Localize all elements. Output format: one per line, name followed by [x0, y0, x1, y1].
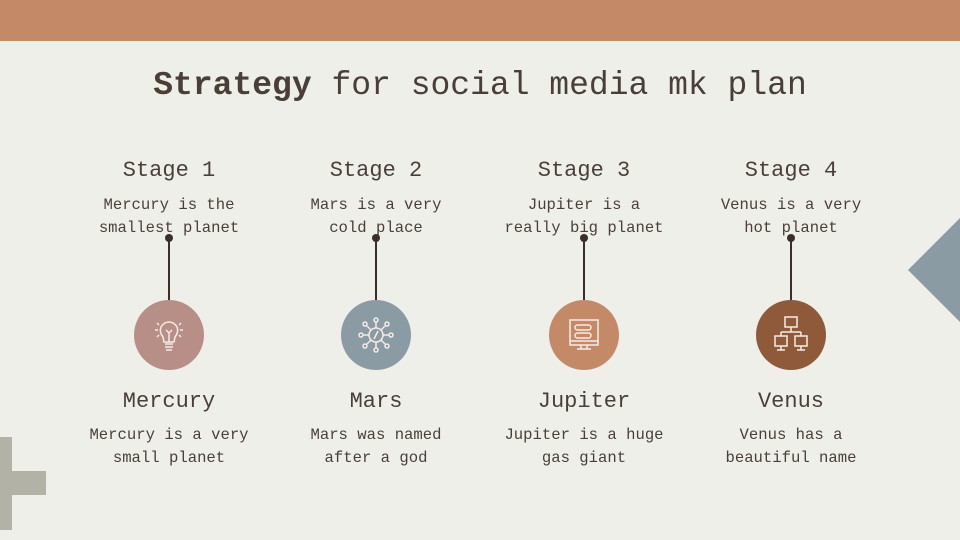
icon: lightbulb [134, 300, 204, 370]
stage 4 heading: Stage 4 [745, 158, 837, 183]
stage 3 text: really big planet [504, 219, 664, 237]
stage 1 heading: Stage 1 [123, 158, 215, 183]
icon: computer network [756, 300, 826, 370]
description: small planet [113, 449, 225, 467]
column: stage 3 [504, 158, 664, 467]
name: Mars [350, 389, 402, 414]
connector [168, 238, 170, 300]
description [504, 426, 664, 467]
icon: monitor [549, 300, 619, 370]
stage 1 text: smallest planet [99, 219, 239, 237]
stage 2 text: cold place [329, 219, 423, 237]
column: stage 4 [721, 158, 861, 467]
description: Mercury is a very [89, 426, 249, 444]
stage 1 text [99, 196, 239, 237]
column: stage 2 [310, 158, 442, 467]
stage 4 text [721, 196, 861, 237]
stage 3 heading: Stage 3 [538, 158, 630, 183]
description [725, 426, 856, 467]
decoration: cross [0, 437, 46, 530]
connector [583, 238, 585, 300]
stage 2 heading: Stage 2 [330, 158, 422, 183]
description [310, 426, 442, 467]
stage 1 text: Mercury is the [103, 196, 234, 214]
description: after a god [325, 449, 427, 467]
stage 3 text: Jupiter is a [528, 196, 640, 214]
description: Mars was named [310, 426, 442, 444]
description: gas giant [542, 449, 626, 467]
name: Jupiter [538, 389, 630, 414]
stage 4 text: Venus is a very [721, 196, 861, 214]
icon: network [341, 300, 411, 370]
stage 2 text [310, 196, 442, 237]
description [89, 426, 249, 467]
column: stage 1 [89, 158, 249, 467]
name: Mercury [123, 389, 215, 414]
stage 2 text: Mars is a very [310, 196, 442, 214]
name: Venus [758, 389, 824, 414]
stage 3 text [504, 196, 664, 237]
connector [375, 238, 377, 300]
decoration: right triangle [908, 218, 960, 322]
connector [790, 238, 792, 300]
title: Strategy for social media mk plan [153, 67, 807, 104]
top bar [0, 0, 960, 41]
stage 4 text: hot planet [744, 219, 838, 237]
description: Jupiter is a huge [504, 426, 664, 444]
description: beautiful name [725, 449, 856, 467]
description: Venus has a [740, 426, 842, 444]
